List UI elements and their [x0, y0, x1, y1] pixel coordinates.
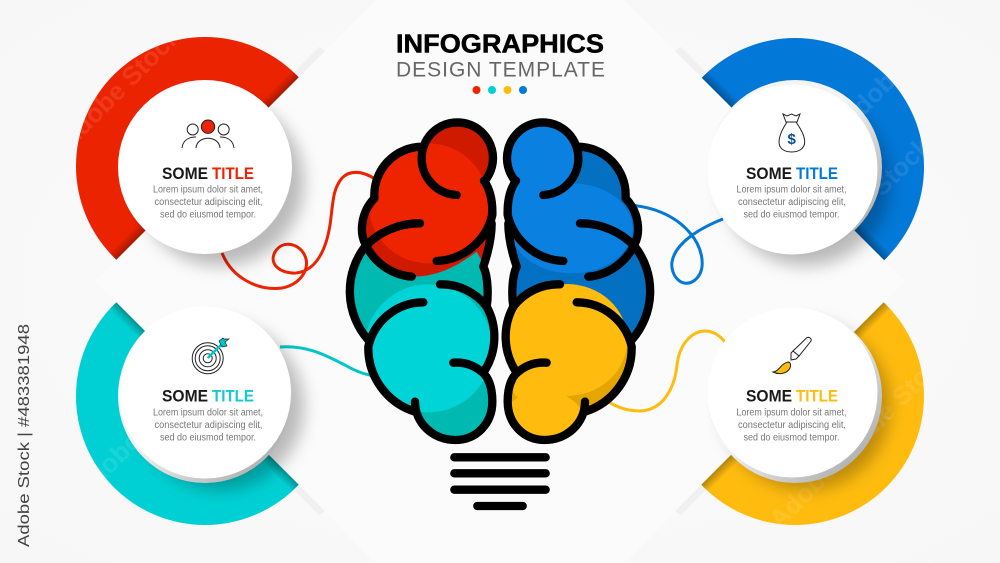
icon: target [192, 338, 229, 374]
wire: red [222, 172, 381, 288]
title: TITLE [212, 388, 254, 406]
title: TITLE [796, 165, 838, 183]
title: TITLE [212, 165, 254, 183]
icon: money bag [779, 114, 805, 152]
circle shadows [136, 98, 890, 490]
title: SOME [746, 388, 792, 406]
brain left fill [354, 126, 490, 436]
wire: teal [280, 347, 376, 376]
body text [153, 408, 263, 444]
title: INFOGRAPHICS [396, 28, 604, 58]
stock id label: Adobe Stock | #483381948 [16, 324, 33, 547]
body text [736, 184, 846, 221]
icon: paint brush [773, 337, 811, 374]
faint fold lines outside rings [294, 47, 706, 515]
brain left outline [350, 122, 494, 440]
title: SOME [162, 388, 208, 406]
body text: sed do eiusmod tempor. [160, 432, 256, 444]
body text: Lorem ipsum dolor sit amet, [153, 408, 263, 418]
body text: Lorem ipsum dolor sit amet, [736, 408, 846, 418]
panel: red ring [76, 37, 299, 260]
body text: consectetur adipiscing elit, [154, 197, 262, 208]
body text: consectetur adipiscing elit, [154, 420, 262, 431]
brain right fill [510, 126, 646, 436]
bulb base bars [454, 457, 546, 506]
body text: consectetur adipiscing elit, [738, 197, 846, 208]
title: SOME [746, 165, 792, 183]
card: yellow [708, 308, 882, 483]
body text: sed do eiusmod tempor. [744, 210, 840, 221]
body text: Lorem ipsum dolor sit amet, [736, 184, 846, 196]
panel: teal ring [76, 302, 299, 525]
watermarks: Adobe Stock [823, 340, 957, 474]
card: blue [708, 80, 882, 254]
panel: yellow ring [701, 302, 924, 525]
brain right outline [506, 122, 650, 440]
body text [153, 184, 263, 221]
watermarks: Adobe Stock [53, 20, 187, 154]
watermarks: Adobe Stock [833, 0, 967, 134]
body text [736, 408, 846, 444]
fold shadows on rings [110, 72, 890, 490]
card: red [118, 80, 292, 254]
card: teal [118, 306, 292, 483]
title: SOME [162, 165, 208, 183]
wire: blue [623, 205, 723, 283]
watermarks: Adobe Stock [803, 130, 937, 264]
body text: consectetur adipiscing elit, [738, 420, 846, 431]
panel: blue ring [702, 38, 924, 260]
body text: sed do eiusmod tempor. [744, 432, 840, 444]
brain and bulb base [340, 100, 660, 506]
body text: Lorem ipsum dolor sit amet, [153, 184, 263, 196]
watermarks: Adobe Stock [763, 400, 897, 534]
watermarks: Adobe Stock [68, 370, 202, 504]
subtitle: DESIGN TEMPLATE [396, 58, 605, 82]
title: TITLE [796, 388, 838, 406]
icon: money bag: $ [788, 131, 797, 148]
colour dots [472, 86, 527, 94]
wire: yellow [593, 331, 725, 411]
icon: people [182, 120, 234, 148]
body text: sed do eiusmod tempor. [160, 210, 256, 221]
